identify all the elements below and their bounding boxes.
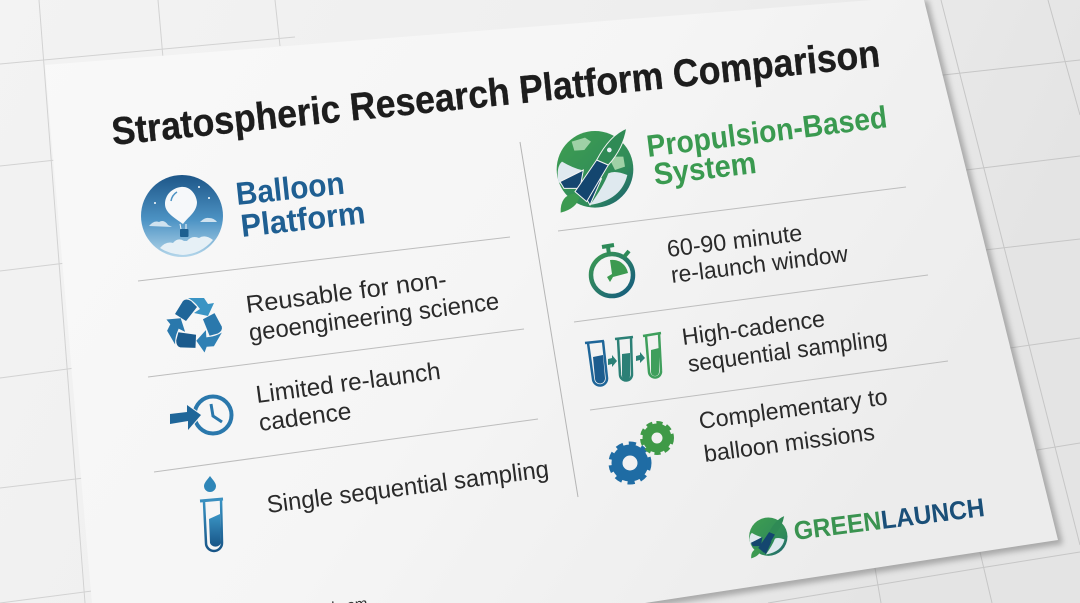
text: 60-90 minute: re-launch window — [669, 240, 850, 288]
heading: balloon platform: Balloon — [234, 165, 346, 212]
icon: balloon — [141, 175, 223, 257]
text: 60-90 minute: 60-90 minute — [665, 220, 804, 262]
icon: logo rocket — [749, 516, 787, 558]
text: high-cadence: High-cadence — [680, 305, 826, 350]
wordmark: GREENLAUNCH — [792, 492, 986, 546]
text: reusable: Reusable for non- — [244, 267, 448, 319]
text: complementary: balloon missions — [702, 419, 876, 467]
title: Stratospheric Research Platform Comparison — [110, 32, 882, 154]
icon: stopwatch — [591, 245, 633, 296]
heading: propulsion-based system: System — [652, 145, 758, 192]
text: complementary: Complementary to — [697, 383, 889, 434]
text: single sequential sampling: Single sequential sampling — [265, 456, 550, 519]
text: 60-90 minute — [665, 220, 850, 288]
panel: propulsion-based system — [557, 99, 948, 482]
text: limited re-launch — [254, 358, 442, 437]
heading: propulsion-based system — [645, 99, 889, 192]
text: limited re-launch: cadence — [257, 398, 353, 437]
icon: clock with arrow — [170, 396, 232, 434]
icon: rocket and globe — [557, 128, 633, 213]
icon: test tube with drop — [200, 476, 223, 551]
column divider — [520, 142, 578, 497]
text: complementary — [697, 383, 889, 467]
text: reusable: geoengineering science — [247, 288, 501, 347]
text: high-cadence: sequential sampling — [686, 325, 889, 377]
icon: recycle — [162, 298, 228, 356]
icon: gears — [611, 423, 672, 482]
heading: propulsion-based system: Propulsion-Based — [645, 99, 889, 164]
heading: balloon platform: Platform — [239, 194, 367, 244]
icon: sequential test tubes — [585, 333, 661, 386]
panel: balloon platform — [138, 165, 550, 551]
logo: GreenLaunch — [749, 492, 986, 558]
heading: balloon platform — [234, 165, 367, 244]
text: limited re-launch: Limited re-launch — [254, 358, 442, 409]
